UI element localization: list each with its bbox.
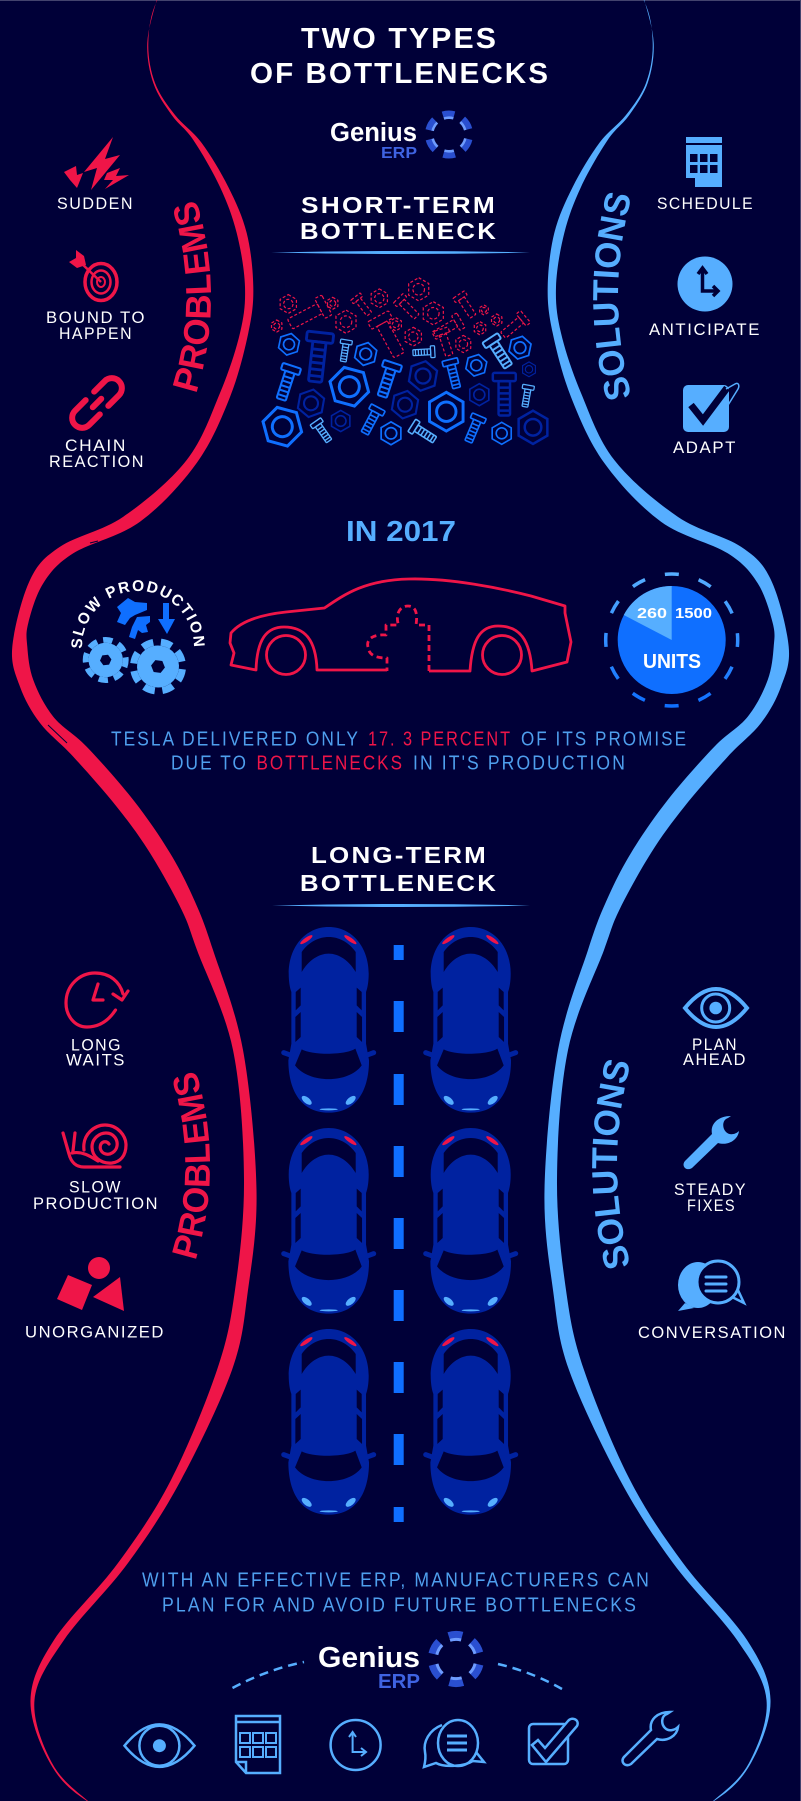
label: schedule: SCHEDULE [657,194,754,213]
label: anticipate: ANTICIPATE [649,320,761,339]
icon: checkbox outline [529,1719,578,1764]
icon: chain [68,374,126,432]
heading: short-term bottleneck [271,192,530,254]
icon: eye outline [124,1724,194,1767]
icon: plan ahead eye [685,989,747,1027]
red dashed parts [272,278,530,361]
icon: adapt checkbox [683,383,739,432]
icon: target [69,250,117,300]
illustration: pile of nuts and bolts [260,278,547,450]
logo: Genius ERP bottom: ERP [378,1671,420,1693]
label: chain reaction: REACTION [49,452,145,471]
label: chain reaction: CHAIN [65,436,127,455]
logo: Genius ERP bottom: Genius [318,1642,420,1674]
icon: unorganized shapes [57,1257,124,1311]
icon: clock outline [331,1720,381,1770]
label: plan ahead: PLAN [692,1035,738,1054]
icon: snail [63,1125,126,1167]
logo: Genius ERP top [330,114,470,162]
label: unorganized: UNORGANIZED [25,1322,165,1342]
label: steady fixes: FIXES [687,1196,736,1215]
label: plan ahead [683,1035,747,1069]
icon: document calendar outline [236,1716,280,1773]
text: erp statement: WITH AN EFFECTIVE ERP, MANUFACTURERS CAN [142,1570,651,1592]
dark blue parts [297,331,547,444]
text: tesla statement: IN IT'S PRODUCTION [413,752,627,774]
problems label top: PROBLEMS [172,202,211,392]
icon row: bottom outlines [124,1712,678,1773]
text: tesla statement: 17. 3 PERCENT [368,728,512,750]
text: erp statement [142,1570,651,1616]
heading: in 2017: IN 2017 [346,516,456,548]
blue solutions contour line [544,0,789,1801]
text: tesla statement [111,728,688,774]
title: TWO TYPES [301,23,498,55]
label: bound to happen: HAPPEN [59,324,133,343]
icon: long waits clock [66,973,128,1027]
label: slow production [33,1178,159,1213]
label: sudden: SUDDEN [57,194,134,213]
heading: short-term bottleneck: SHORT-TERM [301,192,497,218]
icon: conversation bubbles [678,1261,744,1311]
red problems contour line [12,0,257,1801]
pie chart: 260 of 1500 units: 1500 [675,606,712,622]
icon: schedule calendar [686,137,722,187]
dashed connector left [232,1662,304,1688]
icon: slow production gears: SLOW PRODUCTION [71,580,205,648]
label: steady fixes: STEADY [674,1180,747,1199]
label: long waits [66,1036,126,1070]
label: plan ahead: AHEAD [683,1050,747,1069]
logo: Genius ERP bottom [318,1634,481,1693]
label: steady fixes [674,1180,747,1215]
label: bound to happen: BOUND TO [46,308,146,327]
illustration: six cars in traffic [284,927,516,1515]
icon: steady fixes wrench [684,1116,739,1169]
illustration: car outline with missing puzzle piece [230,579,571,674]
pie chart: 260 of 1500 units: 260 [637,606,667,622]
heading: long-term bottleneck [272,842,530,907]
illustration: road lane dashes [394,945,404,1522]
icon: anticipate clock [678,256,732,312]
solutions label bottom: SOLUTIONS [592,1060,629,1268]
pie chart: 260 of 1500 units: UNITS [643,651,701,673]
icon: slow production gears [71,580,205,694]
label: slow production: PRODUCTION [33,1194,159,1213]
text: tesla statement: TESLA DELIVERED ONLY [111,728,360,750]
bright blue parts [260,332,532,450]
logo: Genius ERP top: ERP [381,145,417,162]
light blue parts [310,333,534,446]
label: slow production: SLOW [69,1178,122,1196]
title [250,23,550,90]
icon: wrench outline [623,1712,678,1765]
label: conversation: CONVERSATION [638,1323,787,1342]
text: tesla statement: OF ITS PROMISE [521,728,688,750]
text: tesla statement: DUE TO [171,752,248,774]
heading: long-term bottleneck: LONG-TERM [311,842,488,868]
label: chain reaction [49,436,145,471]
icon: sudden lightning [64,137,129,190]
solutions label top: SOLUTIONS [593,192,630,400]
icon: conversation outline [424,1720,484,1767]
label: bound to happen [46,308,146,343]
heading: long-term bottleneck: BOTTLENECK [300,870,498,896]
problems label bottom: PROBLEMS [172,1072,210,1259]
dashed connector right [498,1664,562,1689]
heading: short-term bottleneck: BOTTLENECK [300,218,498,244]
label: long waits: LONG [71,1036,122,1054]
pie chart: 260 of 1500 units [606,574,738,706]
text: tesla statement: BOTTLENECKS [256,752,404,774]
label: adapt: ADAPT [673,438,737,457]
text: erp statement: PLAN FOR AND AVOID FUTURE BOTTLENECKS [162,1594,638,1616]
title: OF BOTTLENECKS [250,58,550,90]
label: long waits: WAITS [66,1050,126,1070]
logo: Genius ERP top: Genius [330,119,417,147]
